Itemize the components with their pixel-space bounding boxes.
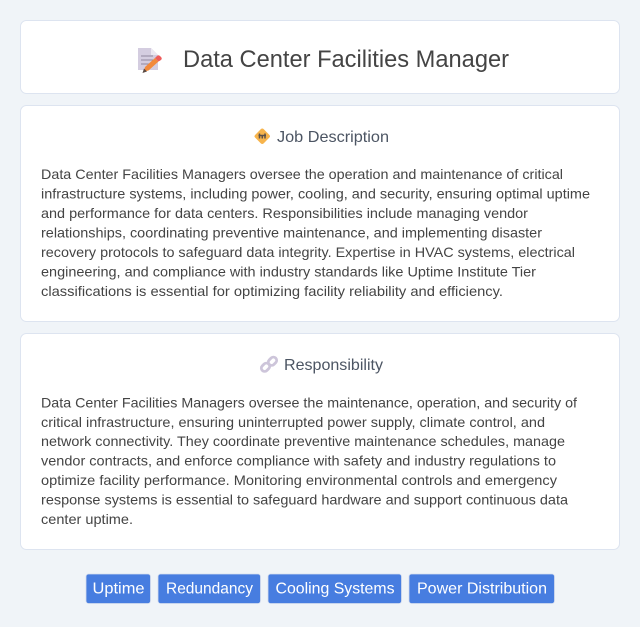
tag: Uptime [86,574,150,604]
text block: job description: and performance for data centers. Responsibilities include managing vendor [41,205,528,221]
tag: Power Distribution: Power Distribution [417,580,547,598]
text block: responsibility: network connectivity. They coordinate preventive maintenance schedules, manage [41,433,565,449]
text block: responsibility: critical infrastructure, ensuring uninterrupted power supply, climate control, and [41,414,545,430]
text block: responsibility [41,394,577,527]
icon: construction diamond sign [254,128,271,145]
icon: document with pencil [138,48,162,73]
tag: Cooling Systems [268,574,402,604]
text block: job description: engineering, and compliance with industry standards like Uptime Institute Tier [41,263,536,279]
text block: responsibility: optimize facility performance. Monitoring environmental controls and emergency [41,472,557,488]
title: Data Center Facilities Manager [183,46,509,73]
panel: job description [20,106,620,322]
heading: job description: Job Description [277,129,389,146]
text block: job description: relationships, coordinating preventive maintenance, and implementing disaster [41,224,542,240]
panel: title header [20,20,620,94]
tag: Uptime: Uptime [92,580,145,598]
tag: Power Distribution [409,574,554,604]
icon: chain link [260,356,278,373]
heading: responsibility: Responsibility [284,357,383,374]
text block: job description: Data Center Facilities Managers oversee the operation and maintenance of critical [41,166,563,182]
text block: responsibility: vendor contracts, and enforce compliance with safety and industry regulations to [41,452,556,468]
tag: Redundancy: Redundancy [166,580,253,598]
text block: job description: recovery protocols to safeguard data integrity. Expertise in HVAC systems, electrical [41,244,575,260]
tag: Redundancy [158,574,260,604]
text block: job description: classifications is essential for optimizing facility reliability and efficiency. [41,283,503,299]
text block: job description: infrastructure systems, including power, cooling, and security, ensuring optimal uptime [41,185,590,201]
tag: Cooling Systems: Cooling Systems [276,580,394,598]
text block: responsibility: response systems is essential to safeguard hardware and support continuous data [41,491,568,507]
text block: responsibility: center uptime. [41,511,133,527]
text block: job description [41,166,590,299]
panel: responsibility [20,334,620,550]
text block: responsibility: Data Center Facilities Managers oversee the maintenance, operation, and security of [41,394,577,410]
